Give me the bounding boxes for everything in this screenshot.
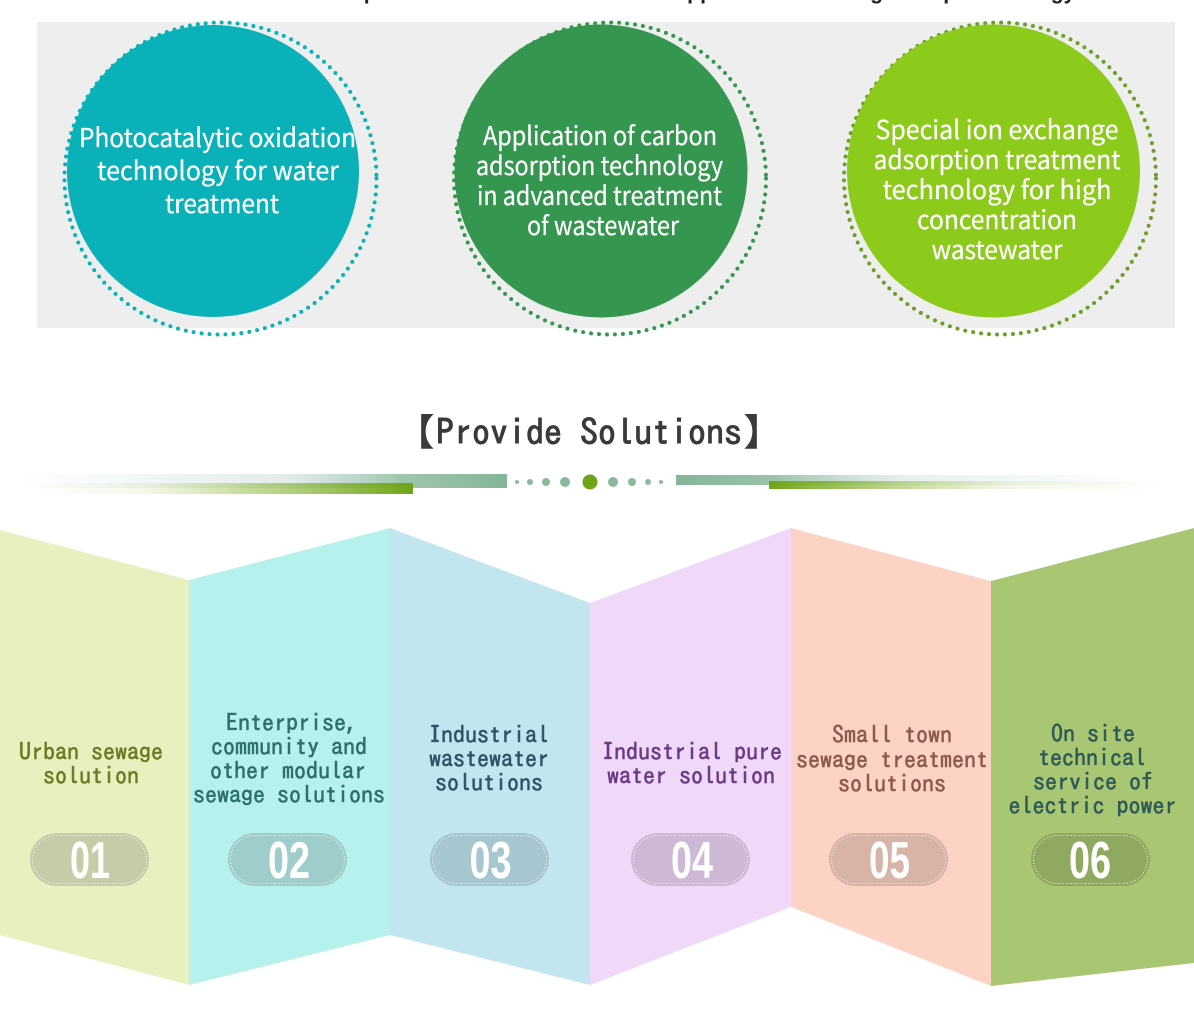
divider ornament	[20, 474, 1170, 494]
panel 02: modular sewage	[189, 528, 390, 985]
panel background	[37, 22, 1175, 328]
panel 05: small town sewage: Small town	[832, 722, 952, 746]
panel 03: industrial wastewater: wastewater	[429, 746, 549, 770]
panel 05: small town sewage: 05	[869, 832, 910, 890]
panel 01: urban sewage: 01	[70, 832, 110, 890]
panel 02: modular sewage: Enterprise,	[226, 710, 358, 734]
circle: special ion exchange: concentration	[917, 200, 1077, 237]
circle: photocatalytic oxidation: Photocatalytic oxidation	[79, 118, 356, 155]
circle: photocatalytic oxidation	[64, 22, 376, 334]
panel 02: modular sewage: 02	[268, 832, 310, 890]
circle: photocatalytic oxidation: treatment	[165, 184, 279, 221]
panel 06: on site technical service: service of	[1033, 769, 1153, 793]
heading: Provide Solutions: 】	[745, 414, 781, 450]
circle: carbon adsorption: Application of carbon	[483, 116, 717, 153]
panel 04: industrial pure water: Industrial pure	[602, 739, 782, 763]
panel 06: on site technical service: electric power	[1008, 793, 1176, 817]
panel 02: modular sewage: sewage solutions	[193, 782, 385, 806]
circle: special ion exchange: adsorption treatment	[874, 140, 1121, 177]
circle: special ion exchange: wastewater	[932, 230, 1063, 267]
panel 05: small town sewage: sewage treatment	[796, 747, 988, 771]
circle: special ion exchange: Special ion exchange	[876, 110, 1118, 147]
panel 03: industrial wastewater: 03	[470, 832, 512, 890]
circle: carbon adsorption: adsorption technology	[476, 146, 723, 183]
panel 06: on site technical service: 06	[1069, 832, 1111, 890]
panel 01: urban sewage: solution	[43, 763, 139, 787]
panel 03: industrial wastewater: Industrial	[429, 722, 549, 746]
panel 01: urban sewage	[0, 530, 189, 985]
panel 02: modular sewage: community and	[211, 734, 367, 758]
panel 03: industrial wastewater: solutions	[435, 770, 543, 794]
panel 06: on site technical service: On site	[1051, 721, 1135, 745]
panel: technology circles	[37, 22, 1175, 334]
panel 02: modular sewage: other modular	[210, 758, 366, 782]
panel 05: small town sewage	[791, 528, 991, 986]
panel 04: industrial pure water	[590, 528, 791, 985]
circle: special ion exchange	[844, 22, 1156, 334]
panel 01: urban sewage: Urban sewage	[19, 739, 163, 763]
circle: special ion exchange: technology for high	[882, 170, 1112, 207]
circle: carbon adsorption: in advanced treatment	[477, 176, 722, 213]
circle: carbon adsorption: of wastewater	[527, 206, 680, 243]
heading: Provide Solutions: Provide Solutions	[436, 414, 742, 450]
panel 03: industrial wastewater	[390, 528, 590, 985]
circle: photocatalytic oxidation: technology for water	[97, 151, 340, 188]
panel 06: on site technical service	[991, 528, 1194, 986]
panel 04: industrial pure water: water solution	[607, 763, 775, 787]
panel 06: on site technical service: technical	[1038, 745, 1146, 769]
panel 05: small town sewage: solutions	[838, 771, 946, 795]
panel 04: industrial pure water: 04	[671, 832, 713, 890]
heading: Provide Solutions: 【	[397, 414, 433, 450]
circle: carbon adsorption	[454, 22, 766, 334]
